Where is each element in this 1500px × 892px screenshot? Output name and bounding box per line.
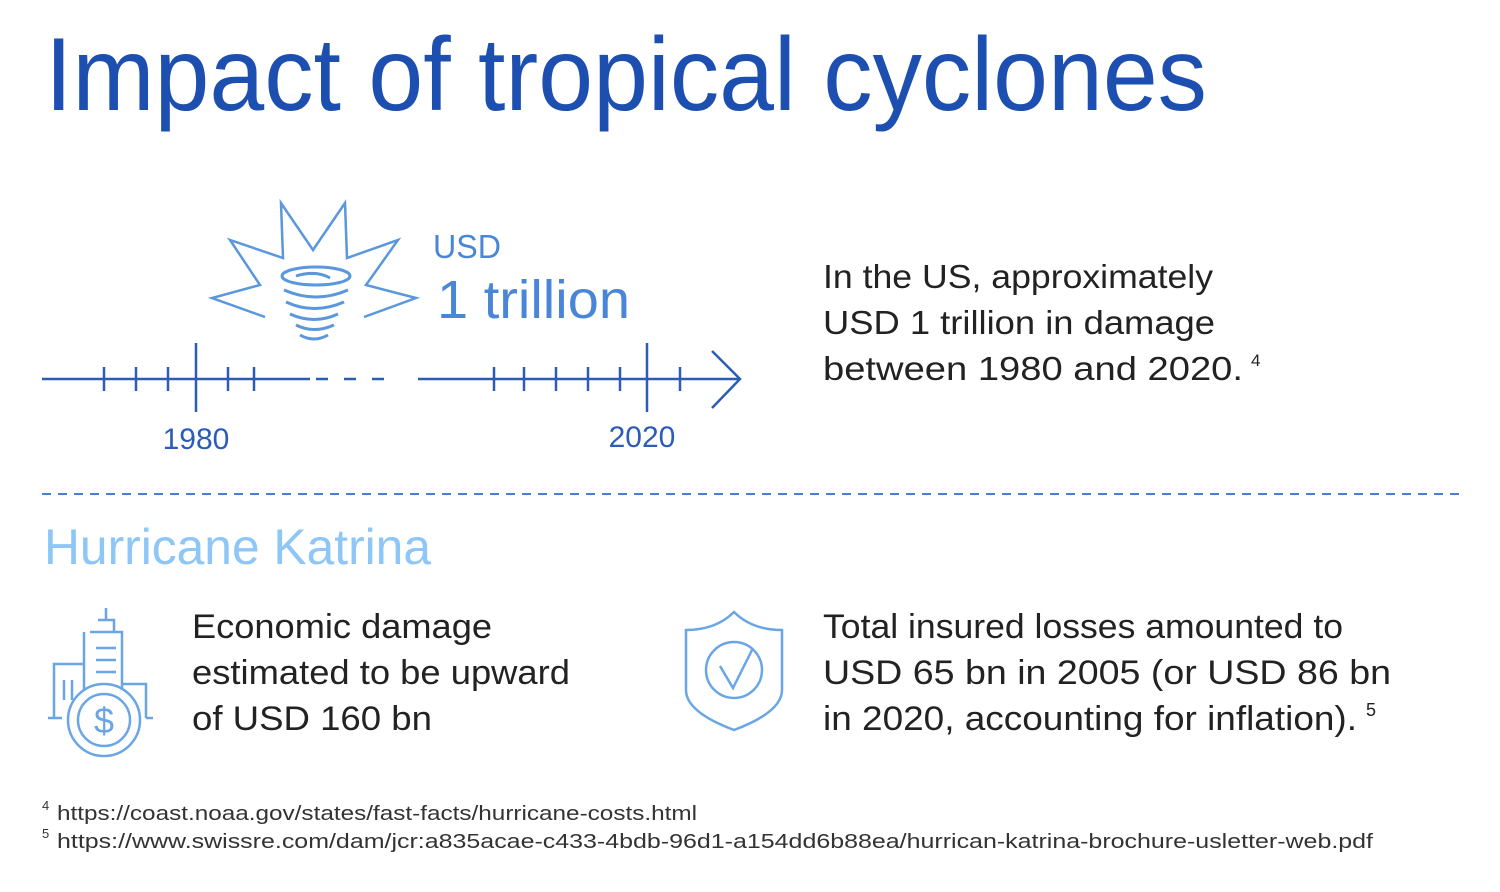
heading: Hurricane Katrina: Hurricane Katrina bbox=[44, 519, 431, 575]
text: insured losses: in 2020, accounting for inflation). bbox=[823, 700, 1357, 738]
text: US damage: In the US, approximately bbox=[823, 258, 1214, 295]
text: US damage: 4 bbox=[1251, 351, 1260, 370]
text: insured losses: 5 bbox=[1366, 700, 1376, 720]
text: insured losses bbox=[823, 608, 1391, 738]
text: US damage: USD 1 trillion in damage bbox=[823, 304, 1215, 341]
icon: cyclone starburst bbox=[212, 203, 416, 339]
timeline labels: 1980 bbox=[163, 423, 229, 456]
text: economic damage: Economic damage bbox=[192, 608, 492, 646]
USD 1 trillion label: 1 trillion bbox=[437, 270, 630, 330]
timeline labels bbox=[163, 421, 675, 456]
icon: shield check bbox=[686, 612, 782, 730]
icon: tornado bbox=[282, 267, 350, 339]
text: insured losses: USD 65 bn in 2005 (or USD 86 bn bbox=[823, 654, 1391, 692]
text: insured losses: Total insured losses amounted to bbox=[823, 608, 1343, 646]
footnotes: 5 bbox=[42, 826, 49, 841]
icon: building with dollar bbox=[48, 608, 153, 756]
text: economic damage bbox=[192, 608, 570, 738]
footnotes: 4 bbox=[42, 798, 49, 813]
text: economic damage: estimated to be upward bbox=[192, 654, 570, 692]
footnotes: https://coast.noaa.gov/states/fast-facts/hurricane-costs.html bbox=[57, 803, 697, 825]
text: economic damage: of USD 160 bn bbox=[192, 700, 432, 738]
footnotes bbox=[42, 798, 1374, 853]
USD 1 trillion label bbox=[433, 228, 630, 330]
footnotes: https://www.swissre.com/dam/jcr:a835acae-c433-4bdb-96d1-a154dd6b88ea/hurrican-katrina-brochure-usletter-web.pdf bbox=[57, 831, 1374, 853]
text: US damage: between 1980 and 2020. bbox=[823, 350, 1243, 387]
title: Impact of tropical cyclones bbox=[45, 17, 1207, 133]
timeline arrow bbox=[42, 343, 740, 412]
USD 1 trillion label: USD bbox=[433, 228, 501, 265]
timeline labels: 2020 bbox=[609, 421, 675, 454]
text: US damage bbox=[823, 258, 1260, 387]
icon: building with dollar: $ bbox=[94, 700, 114, 741]
